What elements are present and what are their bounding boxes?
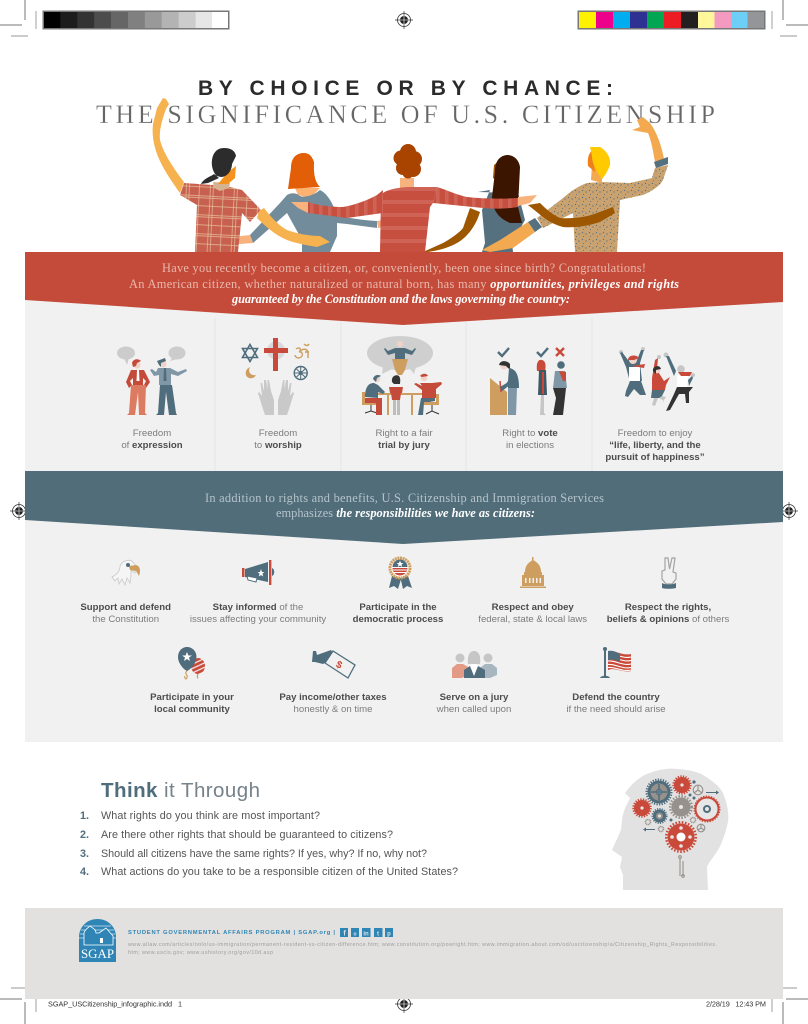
- printer colour bar: [578, 10, 766, 30]
- icon: jury group: [452, 651, 497, 678]
- responsibilities captions row two: [150, 692, 666, 715]
- social icons: [340, 928, 393, 938]
- caption: freedom to enjoy: pursuit of happiness”: [605, 452, 705, 463]
- icon: American flag: [600, 647, 631, 678]
- caption: freedom to enjoy: “life, liberty, and the: [609, 440, 701, 451]
- caption: participate in your local community: Participate in your: [150, 692, 234, 703]
- caption: stay informed: Stay informed of the: [213, 602, 303, 613]
- caption: right to vote: in elections: [506, 440, 554, 451]
- caption: pay taxes: honestly & on time: [294, 704, 372, 715]
- icon: freedom to enjoy life and liberty: [619, 347, 695, 411]
- red gear left: [633, 799, 651, 817]
- caption: respect the rights: beliefs & opinions of others: [607, 614, 729, 625]
- banner text line one: Have you recently become a citizen, or, conveniently, been one since birth? Congratulations!: [162, 261, 646, 275]
- caption: respect and obey: Respect and obey: [492, 602, 574, 613]
- small grey cogs and connectors: [646, 785, 705, 877]
- social icons: o: [353, 932, 357, 938]
- caption: defend the country: if the need should arise: [566, 704, 666, 715]
- question numbers: 1.: [80, 810, 89, 822]
- blue banner: [25, 471, 783, 544]
- caption: freedom of expression: of expression: [121, 440, 183, 451]
- caption: stay informed: issues affecting your community: [190, 614, 326, 625]
- registration mark bottom: [395, 995, 413, 1013]
- question numbers: [80, 810, 89, 878]
- responsibilities captions row one: [80, 602, 730, 625]
- person 4 dark-haired in blue top: [423, 155, 615, 252]
- caption: freedom to worship: Freedom: [259, 428, 297, 439]
- blue banner text line one: In addition to rights and benefits, U.S. Citizenship and Immigration Services: [205, 491, 604, 505]
- panel: responsibilities: [25, 520, 783, 742]
- caption: right to vote: Right to vote: [502, 428, 558, 439]
- caption: freedom to worship: to worship: [254, 440, 302, 451]
- icon: peace hand: [662, 558, 676, 589]
- footer heading: STUDENT GOVERNMENTAL AFFAIRS PROGRAM | SGAP.org |: [128, 930, 335, 936]
- social icons: p: [387, 932, 391, 938]
- grey gear centre: [670, 796, 692, 818]
- icon: freedom of expression: [117, 346, 187, 415]
- caption: trial by jury: Right to a fair: [375, 428, 433, 439]
- blue gear large: [646, 780, 672, 804]
- icon: tax hand and bill: [312, 650, 355, 678]
- panel: rights: [25, 300, 783, 471]
- red banner: [25, 252, 783, 325]
- blue banner text line two: emphasizes the responsibilities we have as citizens:: [276, 506, 535, 520]
- social icons: in: [363, 932, 369, 938]
- caption: freedom of expression: Freedom: [133, 428, 171, 439]
- question numbers: 4.: [80, 866, 89, 878]
- banner text line two: An American citizen, whether naturalized or natural born, has many opportunities, privileges and rights: [129, 277, 679, 291]
- registration mark top: [395, 11, 413, 29]
- caption: defend the country: Defend the country: [572, 692, 660, 703]
- registration mark right: [780, 502, 798, 520]
- caption: participate in the democratic process: Participate in the: [359, 602, 437, 613]
- caption: freedom to enjoy: Freedom to enjoy: [618, 428, 692, 439]
- person 3 curly-haired in striped shirt: [291, 144, 537, 252]
- print slug right: 2/28/19 12:43 PM: [706, 1000, 766, 1008]
- caption: serve on a jury: Serve on a jury: [440, 692, 509, 703]
- icon: freedom to worship: [242, 338, 309, 415]
- blue gear small: [652, 809, 667, 823]
- social icons: t: [377, 932, 379, 938]
- social icons: f: [343, 930, 346, 938]
- question 3: Should all citizens have the same rights? If yes, why? If no, why not?: [101, 848, 427, 860]
- caption: trial by jury: trial by jury: [378, 440, 431, 451]
- caption: serve on a jury: when called upon: [436, 704, 511, 715]
- icon: megaphone: [242, 560, 274, 585]
- icon: right to vote: [490, 348, 567, 415]
- question numbers: 3.: [80, 848, 89, 860]
- heading: think it through: Think it Through: [101, 779, 260, 802]
- icon: ribbon badge: [389, 558, 412, 589]
- caption: respect the rights: Respect the rights,: [625, 602, 712, 613]
- question 2: Are there other rights that should be guaranteed to citizens?: [101, 829, 393, 841]
- red ring gear right: [694, 796, 720, 822]
- caption: support and defend: the Constitution: [92, 614, 159, 625]
- footer sources: [128, 942, 717, 956]
- icon: tax hand and bill: $: [334, 659, 344, 672]
- footer sources: htm; www.uscis.gov; www.ushistory.org/gov/10d.asp: [128, 950, 273, 956]
- question 1: What rights do you think are most important?: [101, 810, 320, 822]
- person 1 with ponytail in plaid shirt: [153, 98, 330, 252]
- illustration: five people with arms around each other: [153, 98, 668, 252]
- title: [96, 77, 715, 129]
- SGAP logo: SGAP: [81, 947, 114, 961]
- person 2 red-haired in grey top: [205, 153, 421, 252]
- printer grayscale bar: [42, 10, 230, 30]
- footer panel: [25, 908, 783, 999]
- question list: [80, 810, 458, 878]
- caption: pay taxes: Pay income/other taxes: [279, 692, 387, 703]
- title line one: BY CHOICE OR BY CHANCE:: [198, 77, 613, 100]
- icon: trial by jury: [362, 336, 442, 415]
- question 4: What actions do you take to be a responsible citizen of the United States?: [101, 866, 458, 878]
- caption: participate in the democratic process: democratic process: [353, 614, 443, 625]
- icon: eagle: [112, 560, 140, 585]
- caption: participate in your local community: local community: [154, 704, 231, 715]
- rights captions: [121, 428, 705, 463]
- person 5 blond in leopard sweater: [537, 117, 668, 252]
- title line two: THE SIGNIFICANCE OF U.S. CITIZENSHIP: [96, 100, 715, 129]
- banner text line three: guaranteed by the Constitution and the laws governing the country:: [231, 292, 570, 306]
- print slug left: SGAP_USCitizenship_infographic.indd 1: [48, 1000, 182, 1008]
- icon: capitol: [520, 557, 546, 588]
- SGAP logo: [79, 919, 116, 962]
- footer sources: www.allaw.com/articles/nolo/us-immigration/permanent-resident-vs-citizen-difference.htm; www.constitution.org/powright.htm; www.immigration.about.com/od/uscitizenship/a/Citizenship_Rights_Responsibilities.: [128, 942, 717, 948]
- caption: support and defend: Support and defend: [80, 602, 171, 613]
- icon: balloons: [178, 647, 205, 679]
- caption: respect and obey: federal, state & local laws: [478, 614, 587, 625]
- icon: head with gears: [612, 769, 728, 890]
- registration mark left: [10, 502, 28, 520]
- red gear large bottom: [666, 822, 696, 852]
- red gear top: [673, 776, 691, 794]
- question numbers: 2.: [80, 829, 89, 841]
